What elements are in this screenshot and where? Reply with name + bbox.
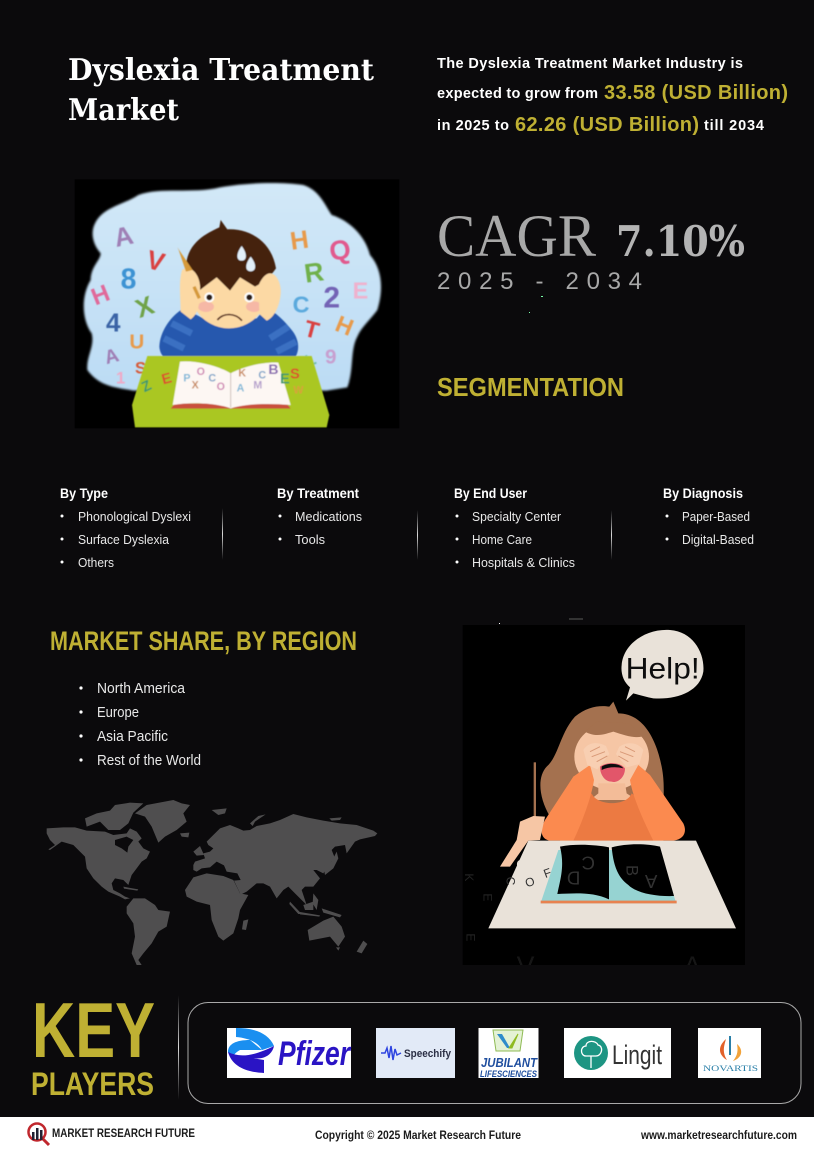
logo: jubilant life sciences [478,1028,538,1079]
table letters: E [280,371,290,387]
key players heading [31,986,155,1102]
key players heading: PLAYERS [31,1066,154,1102]
segment column: by diagnosis [663,485,754,547]
africa [185,873,248,941]
segment column: by end user [454,485,575,570]
segment column: by diagnosis: By Diagnosis [663,485,743,501]
southeast asia islands [289,893,342,917]
illustration: girl asking for help: C [582,853,595,874]
letters: H [87,280,114,311]
letters: E [353,277,368,303]
australia [308,917,345,951]
illustration: boy overwhelmed by letters: K [238,368,246,380]
north america [47,827,150,899]
japan [323,852,338,875]
footer bar [0,1117,814,1150]
letters: U [129,330,144,353]
table letters [139,366,304,396]
logo: lingit: Lingit [612,1040,662,1070]
segment column: by treatment [277,485,362,547]
segment column: by type: Surface Dyslexia [78,532,170,547]
growth summary text: 33.58 (USD Billion) [604,82,788,104]
table letters: S [290,366,300,382]
hair [186,220,276,291]
growth summary text: till 2034 [704,118,764,134]
market share heading: MARKET SHARE, BY REGION [50,626,357,656]
book [541,850,677,903]
hands and arms [180,268,200,319]
logo: jubilant life sciences: JUBILANT [481,1055,538,1070]
segment column: by end user: Hospitals & Clinics [472,555,575,570]
growth summary text: in 2025 to [437,118,509,134]
head [192,258,266,328]
region list: Rest of the World [97,752,201,769]
illustration: girl asking for help [462,625,745,981]
spilling letters [462,857,701,981]
right arm [630,765,685,841]
specks [499,296,543,624]
letters: S [135,358,146,377]
greenland [135,800,190,843]
letters: T [301,315,322,344]
CAGR value: CAGR [437,203,596,269]
eurasia [193,814,377,905]
title: Market [68,93,179,128]
letters: Q [327,233,353,267]
arctic islands [85,803,143,830]
region list: North America [97,680,186,697]
table letters: W [293,384,304,396]
uk [193,846,204,856]
key players logo panel [188,1002,801,1104]
mouth [600,763,625,782]
letters: A [111,220,136,253]
growth summary text: The Dyslexia Treatment Market Industry is [437,56,743,72]
face and neck [574,723,649,790]
madagascar [242,919,248,930]
letters: 9 [325,345,336,368]
logo: novartis: NOVARTIS [703,1063,758,1073]
spilling letters: V [517,951,535,981]
table [132,356,329,427]
illustration: boy overwhelmed by letters: O [217,381,225,393]
table letters: E [160,370,174,388]
spilling letters: C [504,877,518,886]
spilling letters: E [464,933,478,941]
letters [87,220,368,387]
iceland [180,833,189,837]
illustration: girl asking for help: A [644,871,657,892]
pencil [534,762,536,822]
logo: speechify [376,1028,455,1078]
key players heading: KEY [32,986,155,1074]
segment column: by diagnosis: Digital-Based [682,532,754,547]
segment column: by treatment: Tools [295,532,325,547]
torso [560,793,663,842]
illustration: boy overwhelmed by letters: A [237,383,245,395]
cloud background [84,183,381,391]
illustration: boy overwhelmed by letters: P [183,373,190,385]
illustration: boy overwhelmed by letters: C [258,369,266,381]
illustration: girl asking for help: D [567,868,580,889]
segment column: by end user: Home Care [472,532,532,547]
letters: 4 [106,308,121,338]
spilling letters: A [683,951,701,981]
illustration: girl asking for help: Help! [626,652,700,685]
eyes and mouth [204,292,214,302]
segmentation heading: SEGMENTATION [437,372,624,402]
letters: H [288,226,310,256]
CAGR value: 7.10% [616,217,745,266]
spilling letters: D [516,857,525,871]
logo: jubilant life sciences: LIFESCIENCES [480,1069,537,1079]
letters: R [302,256,326,289]
CAGR value: 2025 - 2034 [437,268,642,295]
illustration: boy overwhelmed by letters: B [268,361,278,377]
growth summary text [437,56,788,136]
illustration: boy overwhelmed by letters: M [253,379,262,391]
hair [540,702,664,817]
letters: V [144,244,169,278]
open book [171,403,291,409]
illustration: boy overwhelmed by letters [75,179,399,428]
shirt [159,308,298,363]
new zealand [357,941,367,953]
region list [79,680,201,769]
letters: X [131,289,158,324]
segment column: by type: Phonological Dyslexi [78,509,191,524]
segment column: by diagnosis: Paper-Based [682,509,750,524]
illustration: girl asking for help: B [623,865,642,876]
spilling letters: E [480,893,494,901]
spilling letters: F [542,865,553,881]
speck mark [569,618,583,620]
speech bubble [621,630,703,701]
segment column: by end user: By End User [454,485,527,501]
letters: A [102,345,121,369]
table [488,841,736,928]
left arm [542,765,594,841]
footer bar: Copyright © 2025 Market Research Future [315,1128,521,1142]
growth summary text: 62.26 (USD Billion) [515,114,699,136]
title: Dyslexia Treatment [68,53,374,88]
region list: Europe [97,704,139,721]
hand with pencil [500,816,545,867]
spilling letters: K [462,873,476,881]
world map [47,800,377,965]
logo: speechify: Speechify [404,1048,452,1060]
growth summary text: expected to grow from [437,86,598,102]
segment column: by type: By Type [60,485,108,501]
letters: H [332,310,357,341]
illustration: boy overwhelmed by letters: X [192,379,200,391]
arctic archipelagos [212,808,342,826]
footer logo [28,1124,49,1145]
illustration: boy overwhelmed by letters: C [208,373,216,385]
logo: novartis [698,1028,761,1078]
south america [127,898,170,965]
letters: 2 [323,281,340,314]
logo: pfizer [227,1028,351,1078]
CAGR value [437,203,745,295]
letters: 1 [116,368,125,387]
segment column: by type [60,485,191,570]
segment column: by treatment: Medications [295,509,362,524]
title [68,53,374,128]
logo: lingit [564,1028,671,1078]
segment column: by end user: Specialty Center [472,509,562,524]
illustration: boy overwhelmed by letters: O [197,366,205,378]
footer bar: MARKET RESEARCH FUTURE [52,1126,195,1140]
caribbean [123,887,138,891]
spilling letters: O [523,874,537,890]
letters: C [293,292,310,318]
sweat drops [237,246,255,271]
table letters: Z [139,378,154,396]
segment column: by treatment: By Treatment [277,485,359,501]
region list: Asia Pacific [97,728,168,745]
pencil [177,247,193,272]
logo: pfizer: Pfizer [278,1035,351,1073]
segment column: by type: Others [78,555,114,570]
letters: L [303,349,319,371]
hands [583,743,609,769]
letters: 8 [121,263,136,295]
